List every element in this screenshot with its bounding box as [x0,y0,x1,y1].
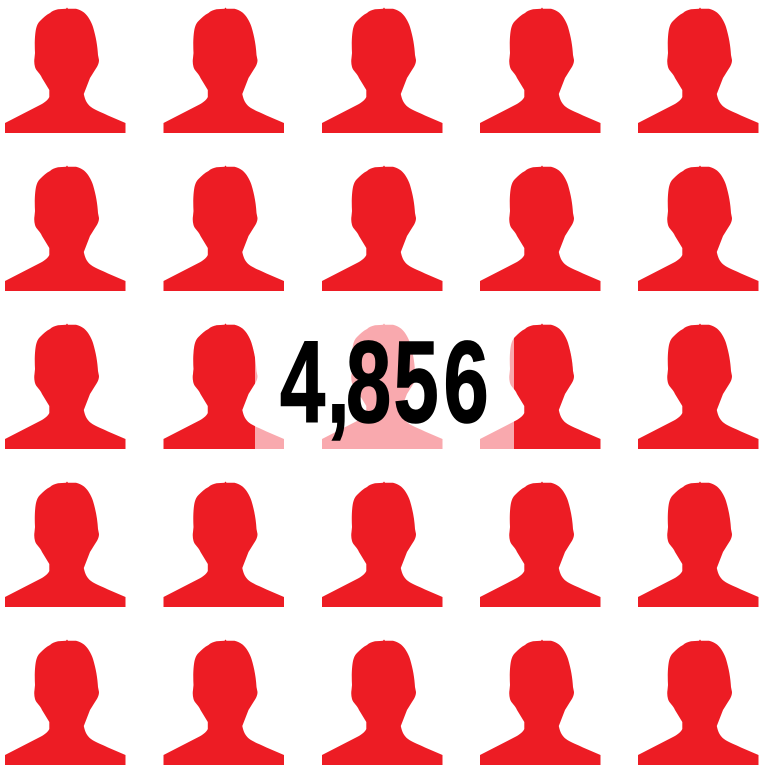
row 4 of people [5,482,758,607]
row 1 of people [5,8,758,133]
row 2 of people [5,166,758,291]
row 5 of people [5,640,758,765]
central number: 4,856 [280,318,489,447]
row 3 of people, centre partially faded [5,324,758,449]
